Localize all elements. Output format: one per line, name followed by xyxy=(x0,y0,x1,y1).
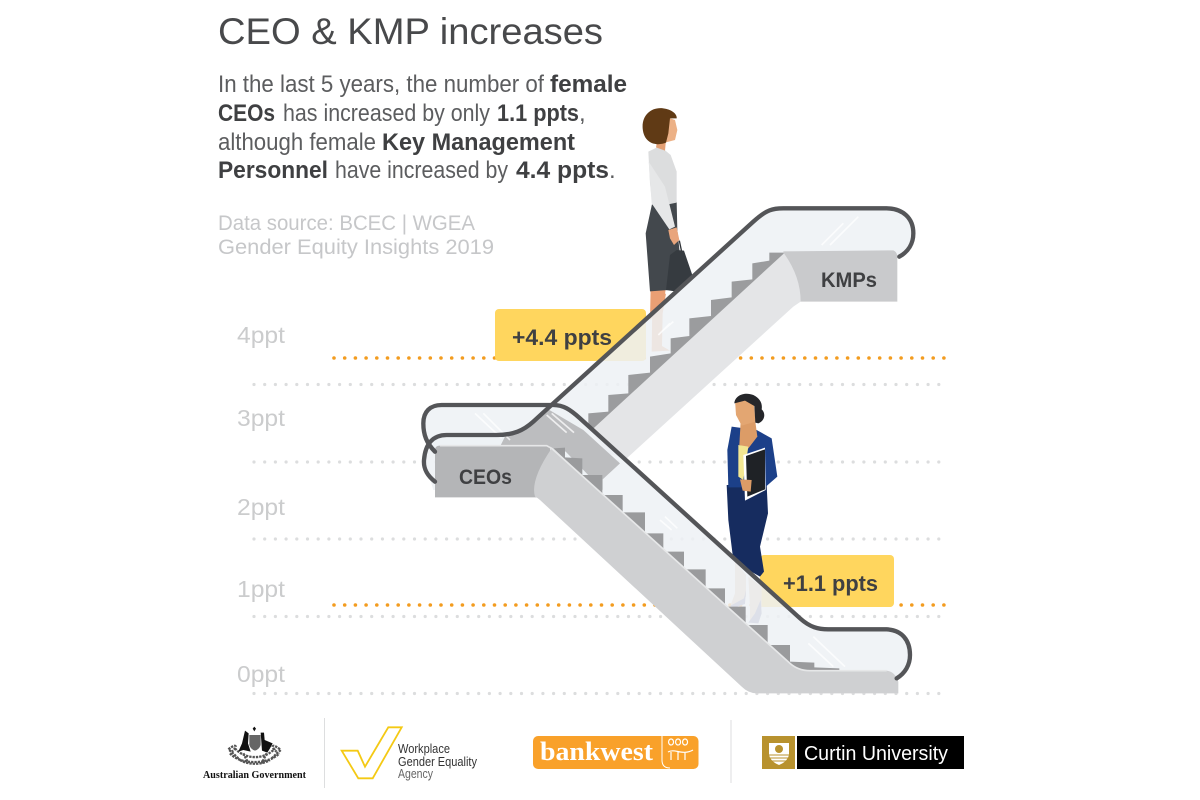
axis labels: 2ppt xyxy=(237,494,286,520)
figure: woman on CEO escalator xyxy=(727,394,777,623)
data source xyxy=(218,212,494,259)
escalator: CEOs glass, steps and body xyxy=(423,405,910,693)
escalator: KMPs glass, steps and body xyxy=(424,208,913,490)
logo: Workplace Gender Equality Agency: Gender Equality xyxy=(398,754,477,769)
callout box: +4.4 ppts background xyxy=(495,309,646,361)
callout text: +1.1 ppts: +1.1 ppts xyxy=(783,571,878,596)
label: KMPs: KMPs xyxy=(821,269,877,292)
logo: Workplace Gender Equality Agency xyxy=(342,727,477,781)
logo: Curtin University xyxy=(762,736,964,769)
logo: Australian Government xyxy=(203,727,306,781)
KMP steps xyxy=(588,253,785,433)
KMP glass panel xyxy=(424,208,913,490)
KMP glass reflections xyxy=(658,217,858,335)
coat of arms xyxy=(228,727,281,764)
KMP body xyxy=(592,253,801,458)
title: CEO & KMP increases xyxy=(218,11,603,52)
logo: Bankwest: bankwest xyxy=(540,737,653,766)
intro text block xyxy=(218,71,627,184)
landing shadow xyxy=(500,409,620,490)
divider between logos xyxy=(324,718,731,788)
data source: Gender Equity Insights 2019 xyxy=(218,236,494,259)
intro text block: . xyxy=(609,157,616,184)
bankwest emblem xyxy=(668,739,693,760)
data source: Data source: BCEC | WGEA xyxy=(218,212,475,235)
axis labels: 3ppt xyxy=(237,405,286,431)
intro text block: 1.1 ppts xyxy=(497,100,579,127)
CEO body highlight xyxy=(440,446,887,671)
logo: Workplace Gender Equality Agency: Agency xyxy=(398,766,433,781)
yellow tick xyxy=(342,727,402,778)
CEO glass panel xyxy=(423,405,910,678)
intro text block: , xyxy=(579,100,586,127)
axis labels xyxy=(237,322,286,687)
figure: woman on KMP escalator xyxy=(643,108,693,352)
intro text block: CEOs xyxy=(218,100,275,127)
logo: Curtin University: Curtin University xyxy=(804,743,948,765)
CEO landing xyxy=(435,446,553,497)
handrail: CEOs xyxy=(423,405,910,678)
CEO steps xyxy=(553,448,839,673)
intro text block: In the last 5 years, the number of xyxy=(218,71,544,98)
axis labels: 1ppt xyxy=(237,576,286,602)
CEO glass reflections xyxy=(475,413,845,667)
logo: Australian Government: Australian Government xyxy=(203,769,306,781)
label: CEOs: CEOs xyxy=(459,466,512,489)
CEO body xyxy=(534,448,898,693)
intro text block: although female xyxy=(218,129,376,156)
callout text: +4.4 ppts: +4.4 ppts xyxy=(512,325,612,350)
intro text block: Personnel xyxy=(218,157,328,184)
intro text block: female xyxy=(550,71,627,98)
Curtin crest xyxy=(769,743,789,765)
intro text block: has increased by only xyxy=(283,100,490,127)
logo: Workplace Gender Equality Agency: Workplace xyxy=(398,741,450,756)
axis labels: 4ppt xyxy=(237,322,286,348)
callout box: +1.1 ppts background xyxy=(760,555,894,607)
intro text block: Key Management xyxy=(382,129,575,156)
handrail: KMPs xyxy=(424,208,913,482)
logo: Bankwest xyxy=(533,736,698,769)
intro text block: 4.4 ppts xyxy=(516,157,609,184)
axis labels: 0ppt xyxy=(237,661,286,687)
intro text block: have increased by xyxy=(335,157,508,184)
KMP landing xyxy=(783,250,897,307)
gridlines xyxy=(254,358,947,694)
